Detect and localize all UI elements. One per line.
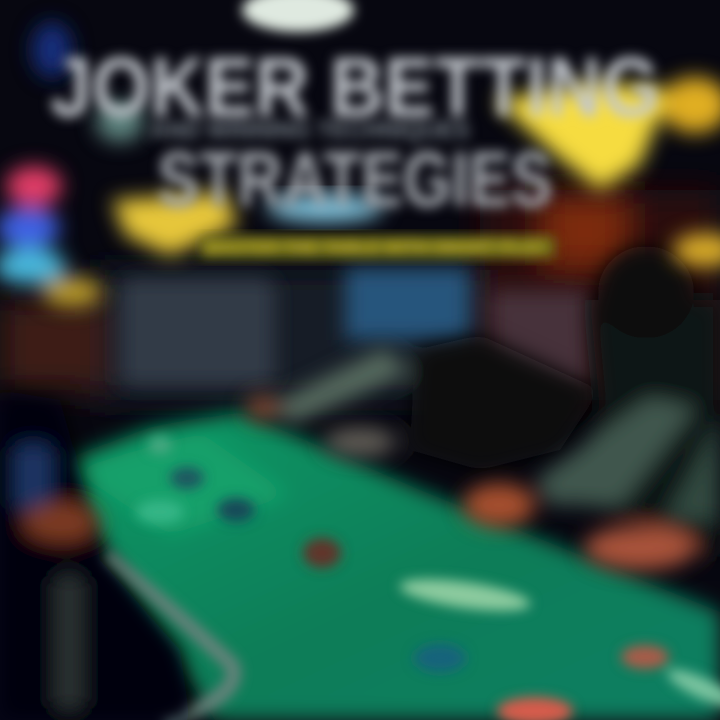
yellow lights (112, 77, 720, 267)
wall panels (120, 268, 590, 390)
poker table (58, 412, 720, 720)
table highlights and chips (136, 436, 720, 720)
centre player (245, 335, 600, 470)
title line 3: STRATEGIES (158, 135, 552, 223)
title line 2: AND WINNING TECHNIQUES (150, 117, 470, 144)
table rail (105, 555, 234, 720)
left player silhouette (0, 390, 190, 720)
right player (463, 246, 720, 570)
title (50, 40, 660, 223)
left colour stack icon (0, 22, 144, 307)
yellow subtitle bar: MASTER THE TABLE WITH SMART PLAY (205, 237, 546, 259)
title line 1: JOKER BETTING (50, 40, 660, 134)
back wall (0, 190, 720, 400)
blue accent under title (267, 194, 383, 222)
lamp (242, 0, 354, 32)
